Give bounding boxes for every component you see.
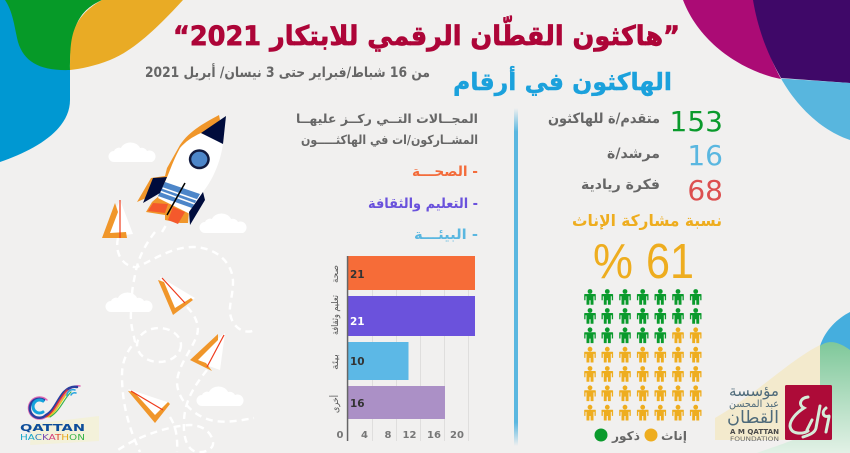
- paper plane 2: [158, 277, 195, 315]
- subtitle: dates: من 16 شباط/فبراير حتى 3 نيسان/ أبريل 2021: [145, 63, 430, 81]
- female participation percent: 61: [646, 235, 694, 289]
- female participation heading: نسبة مشاركة الإناث: [572, 211, 722, 230]
- y axis labels: تعليم وثقافة: [331, 295, 341, 335]
- stat: applicants: متقدم/ة للهاكثون: [548, 111, 660, 127]
- pictogram legend: ذكور: [611, 429, 640, 444]
- x axis labels: 16: [427, 430, 441, 441]
- stat: ideas: فكرة ريادية: [581, 177, 660, 193]
- title: ”هاكثون القطّان الرقمي للابتكار 2021“: [173, 15, 680, 52]
- female participation percent: [593, 235, 694, 289]
- paper plane 1: [102, 200, 133, 238]
- logo: Qattan Hackathon: [20, 386, 99, 445]
- logo mark: [785, 385, 832, 440]
- clouds: [106, 142, 247, 406]
- focus areas intro text: [296, 111, 478, 147]
- focus areas intro text: المشــاركون/ات في الهاكثـــــون: [301, 132, 478, 147]
- bar: environment 10: 10: [350, 356, 365, 368]
- focus areas intro text: المجــالات التــي ركــز عليهــا: [296, 111, 478, 126]
- stat: mentors: مرشد/ة: [607, 146, 660, 162]
- logo english name: FOUNDATION: [730, 435, 779, 443]
- logo: Qattan Hackathon: HA C KATH ON: [20, 433, 85, 442]
- bar: other 16: 16: [350, 398, 365, 410]
- pictogram legend: [594, 428, 687, 444]
- logo arabic name: عبد المحسن: [729, 399, 779, 410]
- x axis labels: 8: [385, 430, 392, 441]
- heading: hackathon in numbers: الهاكثون في أرقام: [453, 66, 672, 96]
- y axis labels: أخرى: [329, 395, 341, 413]
- y axis labels: [329, 265, 341, 413]
- bar: other 16: [348, 386, 445, 419]
- paper plane 3: [190, 333, 225, 371]
- bar: environment 10: [348, 342, 408, 380]
- x axis labels: 20: [450, 430, 464, 441]
- people pictogram: [584, 289, 702, 421]
- stat: ideas: 68: [687, 174, 723, 207]
- logo english name: [730, 428, 779, 443]
- bar: health 21: [348, 256, 475, 290]
- bottom right colour shapes: [715, 312, 850, 453]
- bar chart: [329, 256, 475, 441]
- focus area: health: - الصحـــة: [412, 164, 478, 180]
- bar: health 21: 21: [350, 269, 365, 281]
- logo arabic name: مؤسسة: [729, 382, 779, 400]
- stat: applicants: 153: [670, 105, 723, 138]
- logo: Qattan Hackathon: QATTAN: [20, 423, 85, 434]
- stat: applicants: [548, 105, 723, 138]
- logo arabic name: القطان: [727, 408, 779, 428]
- stat: mentors: [607, 139, 723, 172]
- logo arabic name: [727, 382, 779, 428]
- pictogram legend: إناث: [661, 429, 687, 443]
- top right colour shapes: [683, 0, 850, 140]
- x axis labels: 12: [403, 430, 416, 441]
- rocket: [137, 115, 226, 225]
- bar: education 21: [348, 296, 475, 336]
- logo english name: A M QATTAN: [730, 428, 779, 436]
- y axis labels: صحة: [331, 265, 341, 283]
- focus area: education and culture: - التعليم والثقافة: [368, 196, 478, 212]
- x axis labels: [337, 430, 464, 441]
- female participation percent: %: [593, 235, 633, 289]
- bar: education 21: 21: [350, 316, 365, 328]
- stat: mentors: 16: [687, 139, 723, 172]
- x axis labels: 0: [337, 430, 344, 441]
- paper plane 4: [128, 389, 170, 423]
- vertical divider: [514, 108, 518, 446]
- focus area: environment: - البيئـــة: [414, 227, 478, 243]
- top left colour shapes: [0, 0, 183, 162]
- logo: A M Qattan Foundation: [727, 382, 832, 443]
- stat: ideas: [581, 174, 723, 207]
- dashed flight paths: [117, 222, 255, 452]
- y axis labels: بيئة: [331, 354, 341, 370]
- x axis labels: 4: [361, 430, 368, 441]
